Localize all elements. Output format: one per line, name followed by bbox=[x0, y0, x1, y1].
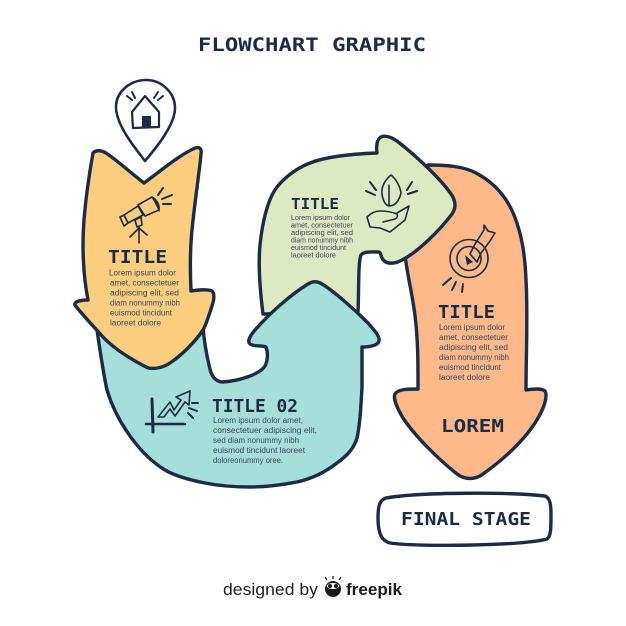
heading: orange title: TITLE bbox=[438, 302, 495, 323]
icon: growth chart bbox=[146, 391, 198, 432]
text: teal body: sed diam nonummy nibh bbox=[213, 436, 299, 445]
text: orange body: amet, consectetuer bbox=[439, 333, 508, 342]
text: yellow body bbox=[109, 268, 180, 328]
text: yellow body: Lorem ipsum dolor bbox=[109, 268, 176, 278]
text: orange body bbox=[439, 323, 509, 382]
text: yellow body: laoreet dolore bbox=[110, 318, 162, 328]
icon: telescope bbox=[120, 188, 172, 243]
text: green body: amet, consectetuer bbox=[291, 220, 353, 230]
text: yellow body: euismod tincidunt bbox=[110, 308, 173, 318]
text: teal body bbox=[213, 416, 317, 465]
label: lorem: LOREM bbox=[441, 416, 504, 437]
text: green body bbox=[291, 213, 353, 260]
text: orange body: euismod tincidunt bbox=[439, 363, 502, 372]
text: orange body: laoreet dolore bbox=[439, 373, 491, 382]
heading: yellow title: TITLE bbox=[108, 247, 167, 268]
text: teal body: Lorem ipsum dolor amet, bbox=[213, 416, 303, 425]
text: yellow body: diam nonummy nibh bbox=[110, 298, 180, 308]
footer: freepik credit: designed by bbox=[223, 581, 319, 599]
heading: green title: TITLE bbox=[291, 195, 339, 213]
text: green body: diam nonummy nibh bbox=[291, 236, 353, 244]
text: teal body: doloreonummy oree. bbox=[213, 456, 283, 465]
panel: teal arrow bbox=[97, 282, 379, 487]
icon: target bbox=[443, 225, 495, 292]
panel: orange arrow bbox=[394, 165, 546, 478]
footer: freepik credit bbox=[223, 576, 403, 599]
title: FLOWCHART GRAPHIC bbox=[198, 34, 426, 56]
panel: final stage bbox=[378, 493, 551, 545]
text: teal body: consectetuer adipiscing elit, bbox=[213, 426, 317, 435]
text: green body: Lorem ipsum dolor bbox=[291, 213, 350, 222]
icon: home pin bbox=[116, 80, 175, 161]
panel: yellow arrow bbox=[75, 148, 214, 368]
text: green body: laoreet dolore bbox=[291, 250, 336, 260]
footer: freepik credit: freepik bbox=[346, 581, 403, 599]
text: orange body: Lorem ipsum dolor bbox=[439, 323, 505, 332]
text: orange body: adipiscing elit, sed bbox=[439, 343, 508, 352]
text: green body: euismod tincidunt bbox=[291, 243, 347, 252]
panel: green arrow bbox=[259, 136, 455, 314]
text: orange body: diam nonummy nibh bbox=[439, 353, 509, 362]
heading: teal title: TITLE 02 bbox=[212, 396, 298, 417]
text: teal body: euismod tincidunt laoreet bbox=[213, 446, 306, 455]
text: green body: adipiscing elit, sed bbox=[291, 228, 353, 237]
text: yellow body: amet, consectetuer bbox=[110, 278, 179, 288]
icon: leaf in hand bbox=[366, 175, 417, 232]
panel: final stage: FINAL STAGE bbox=[401, 509, 531, 530]
text: yellow body: adipiscing elit, sed bbox=[110, 288, 179, 298]
